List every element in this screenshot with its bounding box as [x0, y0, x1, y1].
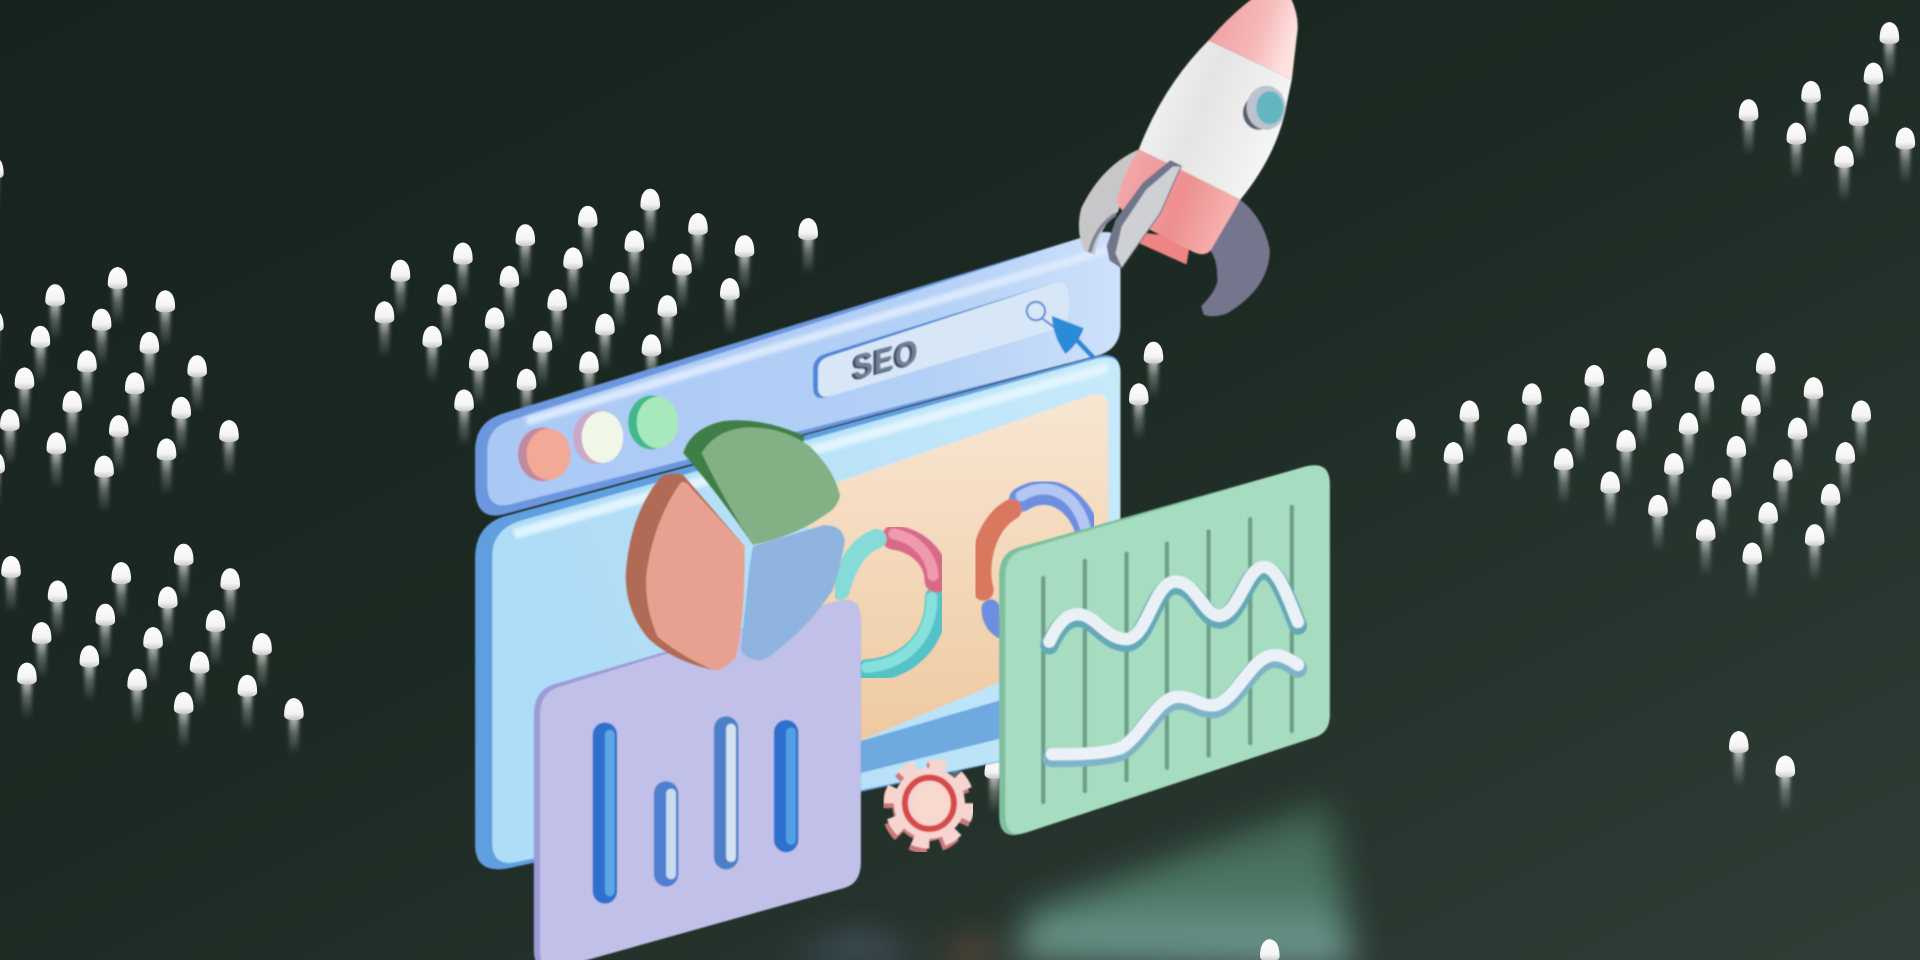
- rocket fin: left inner edge: [1090, 214, 1116, 252]
- search text shadow: SEO: [851, 333, 916, 388]
- dots: bottom right: [1260, 731, 1795, 960]
- panel: green line chart card: [999, 465, 1330, 835]
- dots: left lower cluster: [1, 544, 304, 754]
- chart: left donut ring: [840, 534, 937, 671]
- panel: browser header bar: [475, 232, 1120, 516]
- pie slice: blue: [741, 525, 845, 660]
- lower wave line: [1052, 655, 1298, 758]
- dots: top centre cluster: [375, 189, 1163, 813]
- rocket fin: front: [1108, 162, 1180, 267]
- rocket lower body: [1117, 149, 1240, 254]
- pie slice: green face: [702, 427, 840, 545]
- grid lines: [1043, 507, 1292, 802]
- rocket window: [1243, 86, 1286, 130]
- rocket body: [1139, 40, 1292, 200]
- chart: 3D pie: [626, 420, 845, 670]
- window button: white: [573, 410, 623, 464]
- bar 4: [774, 720, 798, 852]
- pie slice: green rim: [683, 420, 804, 545]
- dots: right cluster: [1396, 348, 1871, 599]
- search bar: [813, 282, 1092, 398]
- rocket nozzle: [1140, 233, 1189, 264]
- panel: browser content window: [475, 355, 1120, 869]
- panel: peach content area: [808, 394, 1108, 742]
- bar 3: [714, 716, 738, 869]
- window button: red: [518, 427, 571, 481]
- bar 1: [593, 722, 617, 904]
- dots: left upper cluster: [0, 157, 239, 512]
- dots: top right cluster: [1739, 22, 1915, 202]
- icon: magnifier: [1027, 302, 1045, 320]
- icon: rocket: [1079, 0, 1298, 316]
- chart: right donut ring: [981, 489, 1089, 631]
- window button: green: [628, 396, 678, 449]
- rocket nose: [1209, 0, 1298, 80]
- light top rim of window: [514, 367, 1108, 534]
- floor reflection: [784, 802, 1353, 960]
- panel: purple bar chart card: [534, 600, 861, 960]
- icon: cursor arrow: [1052, 316, 1092, 356]
- icon: gear: [888, 764, 969, 847]
- upper wave line: [1049, 567, 1298, 645]
- rocket fin: left: [1079, 149, 1139, 255]
- bar 2: [654, 781, 678, 887]
- lower blue edge: [857, 696, 1016, 774]
- light top rim of header: [527, 250, 1108, 421]
- rocket fin: back: [1201, 200, 1270, 316]
- search text: SEO: [853, 331, 919, 387]
- pie slice: salmon rim: [626, 474, 744, 670]
- pie slice: salmon face: [646, 482, 745, 670]
